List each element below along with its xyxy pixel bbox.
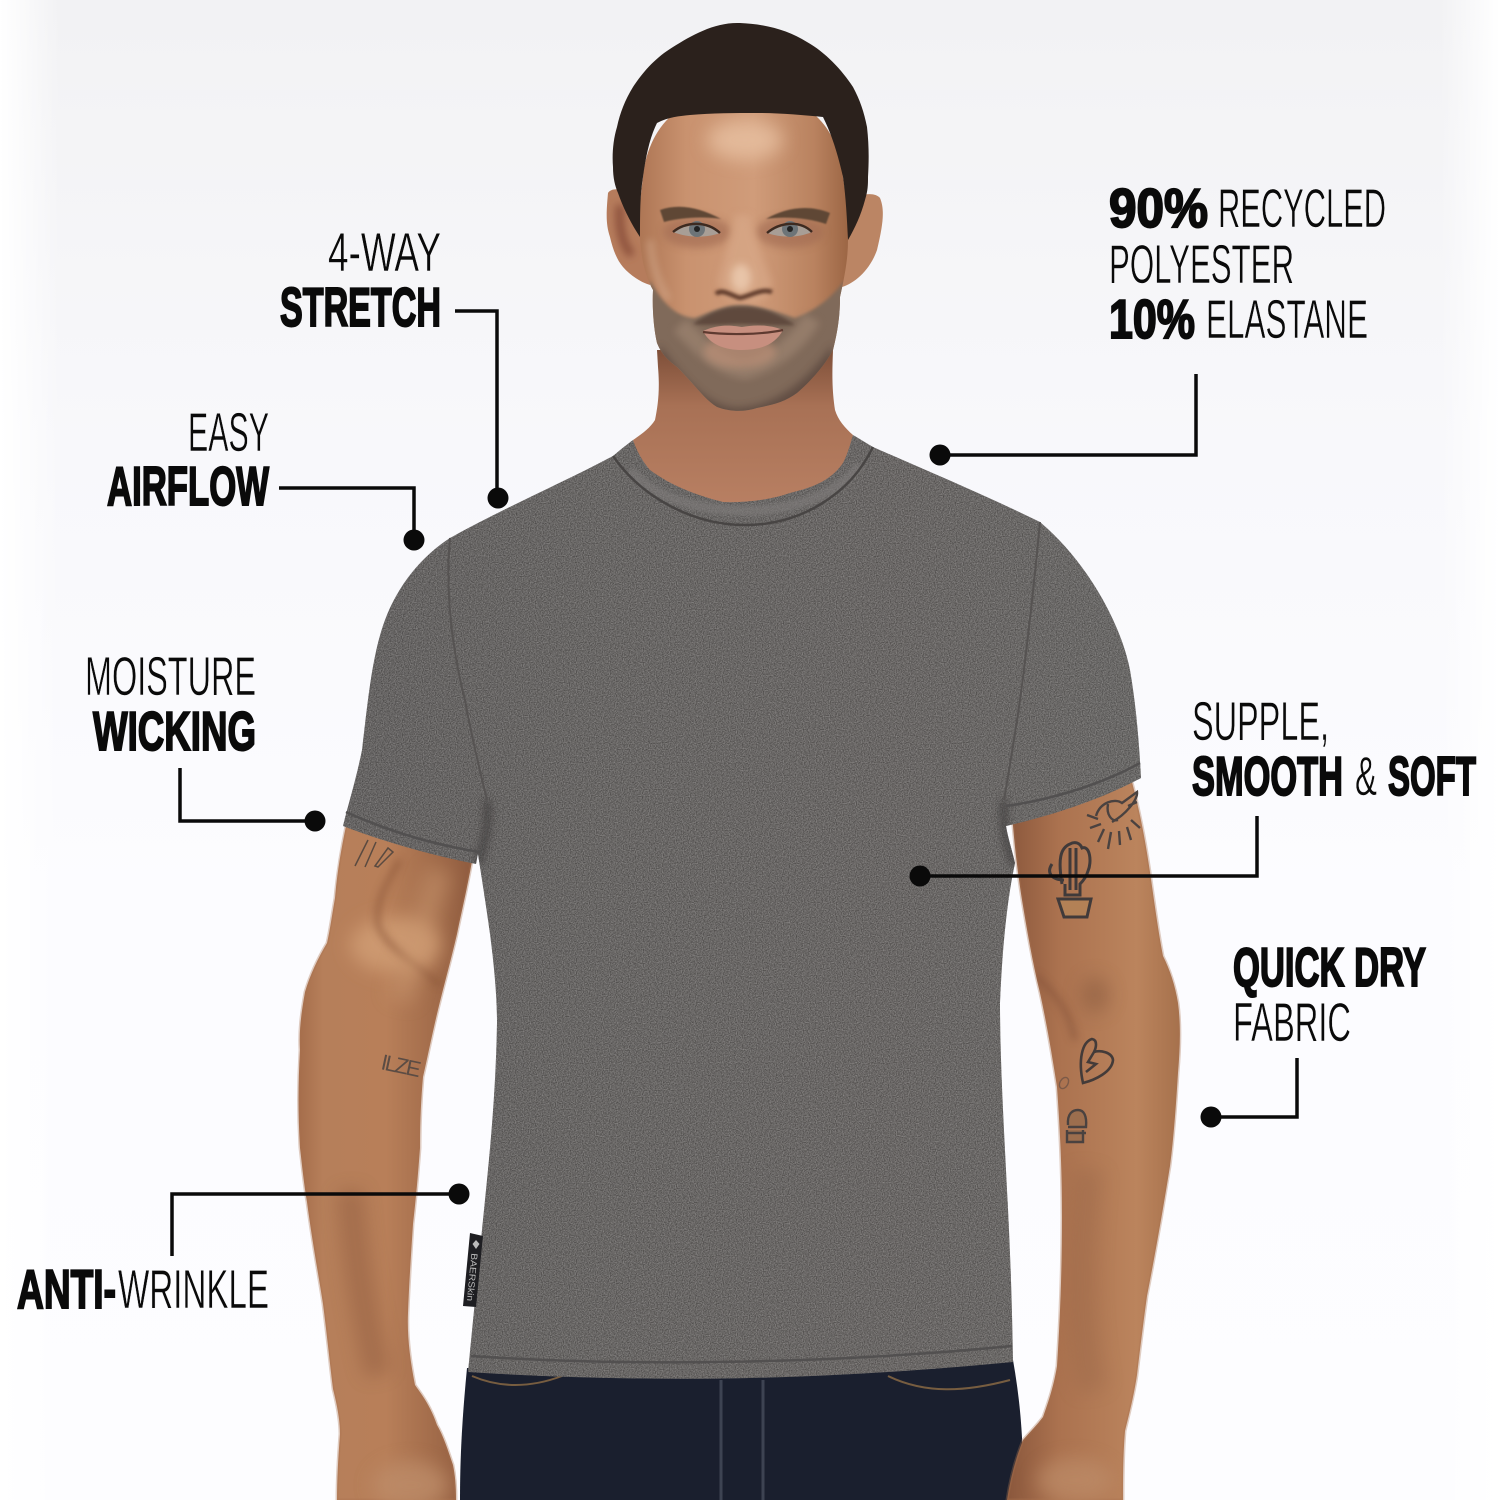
callout: supple, smooth and soft: SMOOTH	[1192, 745, 1343, 807]
hair	[613, 23, 869, 240]
tattoo: balloon	[1058, 1076, 1070, 1090]
callout: anti-wrinkle: WRINKLE	[118, 1258, 269, 1320]
brand tag	[463, 1233, 483, 1307]
side shadows	[650, 240, 668, 300]
eye sockets	[663, 216, 731, 248]
callout: anti-wrinkle: ANTI-	[17, 1258, 116, 1320]
callout: fabric composition: POLYESTER	[1109, 233, 1294, 295]
eyes	[673, 221, 812, 237]
tattoo: burger	[1067, 1110, 1086, 1142]
brand tag: BAERSkin	[465, 1253, 479, 1302]
tattoo: ILZE: ILZE	[379, 1049, 423, 1082]
lips	[703, 325, 783, 350]
right arm	[1007, 775, 1180, 1500]
ears	[607, 189, 883, 287]
nose	[720, 218, 770, 297]
callout: moisture wicking: WICKING	[93, 700, 256, 762]
neck	[633, 350, 853, 510]
left arm	[298, 826, 474, 1500]
callout: quick dry fabric	[1200, 936, 1426, 1128]
face	[640, 113, 848, 411]
callout: quick dry fabric: FABRIC	[1233, 991, 1351, 1053]
callout: fabric composition: ELASTANE	[1206, 288, 1368, 350]
callout: easy airflow: EASY	[188, 401, 269, 463]
figure: man wearing grey t-shirt	[297, 23, 1182, 1500]
moustache	[693, 307, 795, 325]
callout: easy airflow: AIRFLOW	[107, 455, 269, 517]
shirt	[343, 435, 1141, 1379]
callout: anti-wrinkle	[17, 1184, 470, 1320]
callout: supple, smooth and soft: SUPPLE,	[1192, 690, 1329, 752]
jeans	[460, 1360, 1023, 1500]
eyebrows	[660, 207, 830, 224]
beard	[650, 280, 845, 420]
tattoo: cactus	[1050, 843, 1090, 895]
callout: 4-way stretch: 4-WAY	[328, 221, 441, 283]
callout: easy airflow	[107, 401, 424, 550]
callout: moisture wicking: MOISTURE	[85, 645, 256, 707]
callout: 4-way stretch: STRETCH	[280, 276, 441, 338]
callout: supple, smooth and soft	[910, 690, 1476, 886]
forehead highlight	[707, 120, 783, 160]
tattoo: pointing hand	[355, 840, 393, 867]
callout: fabric composition: 10%	[1109, 288, 1195, 350]
callout: 4-way stretch	[280, 221, 508, 508]
callout: moisture wicking	[85, 645, 326, 832]
tattoo: sun	[1087, 792, 1140, 849]
callout: fabric composition	[930, 177, 1386, 466]
chin patch	[704, 336, 776, 368]
tattoo: broken heart	[1081, 1039, 1113, 1083]
callout: fabric composition: 90%	[1109, 177, 1208, 239]
callout: supple, smooth and soft: &	[1355, 745, 1377, 807]
